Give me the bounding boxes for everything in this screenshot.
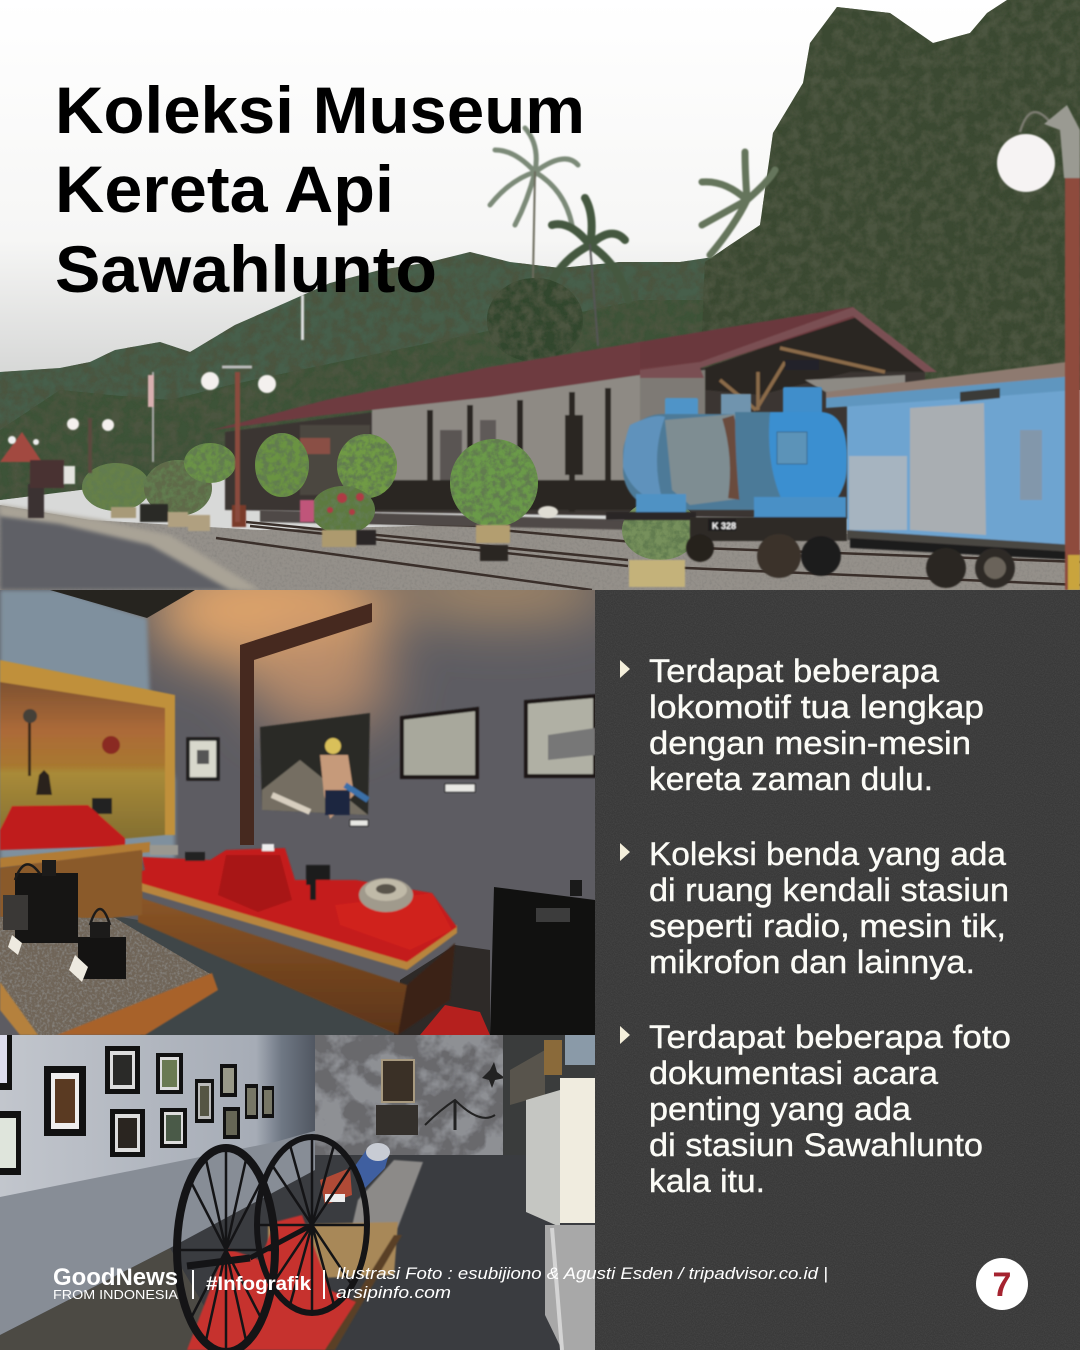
title: Kereta Api — [55, 152, 394, 226]
wood display case — [0, 660, 175, 925]
wooden case below main display — [0, 850, 142, 918]
bullet: control room objects: mikrofon dan lainnya. — [649, 944, 975, 980]
title: Koleksi Museum — [55, 73, 585, 147]
footer photo credit — [336, 1264, 828, 1302]
ground gravel and tracks — [0, 505, 1080, 590]
bullet: documentation photos: di stasiun Sawahlunto — [649, 1127, 983, 1163]
footer logo: GoodNews from Indonesia: GoodNews — [53, 1264, 178, 1291]
bullet: documentation photos: Terdapat beberapa foto — [649, 1019, 1011, 1055]
blue tank wagon: K 328 — [712, 521, 736, 531]
palm trees — [490, 128, 775, 345]
cart wheels — [177, 1137, 367, 1350]
door frame column and beam — [240, 603, 372, 845]
panel: dark text background — [595, 590, 1080, 1350]
warm wall glow — [134, 590, 595, 750]
blue-grey side wall — [0, 590, 175, 860]
flower highlights, pots and roadside objects — [0, 432, 685, 587]
bullet: control room objects — [620, 836, 1009, 980]
bullet: documentation photos: kala itu. — [649, 1163, 765, 1199]
forested hills — [0, 250, 760, 500]
footer photo credit: arsipinfo.com — [336, 1283, 451, 1302]
bullet: documentation photos — [620, 1019, 1011, 1199]
framed photographs — [0, 1035, 274, 1175]
bullet: documentation photos: dokumentasi acara — [649, 1055, 938, 1091]
hill foreground trees — [0, 300, 740, 500]
station roof — [212, 307, 860, 430]
lower grey wall — [0, 1130, 315, 1335]
gravel showcase with lanterns — [0, 860, 218, 1035]
columns and shutters — [430, 388, 608, 512]
page number badge: 7 — [993, 1266, 1011, 1304]
footer logo: GoodNews from Indonesia: FROM INDONESIA — [53, 1287, 178, 1302]
title — [55, 73, 585, 306]
page number badge — [976, 1258, 1028, 1310]
upper wall — [0, 1035, 318, 1197]
footer hashtag — [192, 1270, 325, 1299]
exhibition table with red cloth — [120, 844, 457, 1035]
red cloth under wheels — [187, 1215, 356, 1350]
photo: museum room with red display tables — [0, 590, 595, 1035]
tree canopy right — [700, 0, 1080, 390]
white cabinets right — [526, 1078, 595, 1350]
footer photo credit: Ilustrasi Foto : esubijiono & Agusti Esden / tripadvisor.co.id | — [336, 1264, 828, 1283]
bullet: control room objects: di ruang kendali stasiun — [649, 872, 1009, 908]
icon: bullet triangle — [620, 843, 630, 861]
wall picture frames — [188, 696, 595, 826]
blue and white artefact — [320, 1143, 390, 1205]
display plinth — [268, 1160, 423, 1350]
olive floor left — [0, 1248, 204, 1350]
photo: railway museum station exterior — [0, 0, 1080, 590]
far corridor wall with frames — [503, 1035, 595, 1155]
bullet: control room objects: seperti radio, mesin tik, — [649, 908, 1006, 944]
bullet: locomotives — [620, 653, 984, 797]
bullet: locomotives: Terdapat beberapa — [649, 653, 939, 689]
blue tank wagon — [606, 387, 847, 578]
mural wall — [315, 1035, 505, 1155]
station building — [212, 307, 937, 520]
icon: bullet triangle — [620, 660, 630, 678]
foreground street lamp — [997, 105, 1080, 590]
mural frame and rope — [376, 1060, 505, 1135]
ceiling — [50, 590, 195, 618]
dark panel lower right — [490, 880, 595, 1035]
blue box wagon — [826, 361, 1075, 588]
bullet: control room objects: Koleksi benda yang ada — [649, 836, 1006, 872]
bullet: locomotives: dengan mesin-mesin — [649, 725, 971, 761]
icon: bullet triangle — [620, 1026, 630, 1044]
photo: gallery hall with cart wheels — [0, 1035, 595, 1350]
garden plants — [82, 433, 698, 560]
bullet: locomotives: lokomotif tua lengkap — [649, 689, 984, 725]
pale station walls — [372, 375, 640, 485]
dark palm crown — [487, 278, 583, 362]
title: Sawahlunto — [55, 232, 437, 306]
bullet: documentation photos: penting yang ada — [649, 1091, 911, 1127]
red cloth at bottom — [420, 1005, 490, 1035]
left lamp posts and flag — [8, 295, 304, 522]
floor — [110, 915, 398, 1035]
bullet: locomotives: kereta zaman dulu. — [649, 761, 933, 797]
footer hashtag: #Infografik — [206, 1274, 311, 1295]
